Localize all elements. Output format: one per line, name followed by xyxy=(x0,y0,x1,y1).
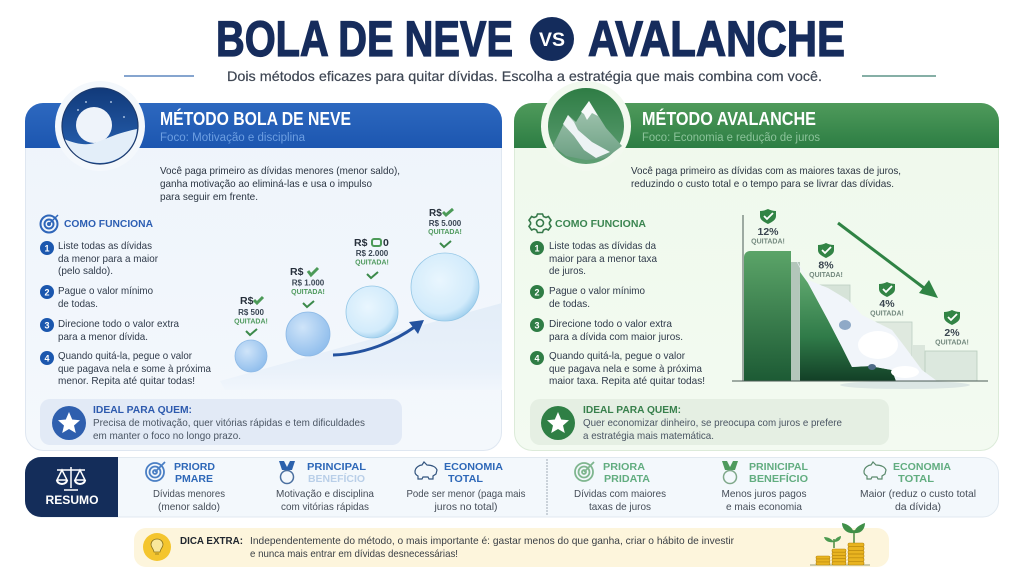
intro text: Você paga primeiro as dívidas menores (menor saldo), xyxy=(160,165,400,177)
heading: como funciona: COMO FUNCIONA xyxy=(555,218,646,230)
column: principal benefício (bola de neve): BENEFÍCIO xyxy=(308,472,365,485)
step 1: (pelo saldo). xyxy=(58,265,113,277)
column: principal benefício (bola de neve): PRINCIPAL xyxy=(307,461,367,473)
label 2%: QUITADA! xyxy=(935,340,969,346)
step 4: Quando quitá-la, pegue o valor xyxy=(549,350,685,362)
step 4: 4 xyxy=(534,354,540,364)
column: principal benefício (avalanche) xyxy=(722,461,809,513)
column: prioridade (avalanche): Dívidas com maiores xyxy=(574,488,666,500)
step 1: de juros. xyxy=(549,265,586,277)
intro text xyxy=(160,165,400,203)
snowball 5000 xyxy=(411,208,479,321)
column: principal benefício (bola de neve): com vitórias rápidas xyxy=(281,501,369,513)
column: economia total (bola de neve): Pode ser menor (paga mais xyxy=(406,488,526,500)
intro text: ganha motivação ao eliminá-las e usa o impulso xyxy=(160,178,372,190)
step 3: para a menor dívida. xyxy=(58,331,148,343)
icon: light bulb xyxy=(143,533,171,561)
avalanche chart xyxy=(732,209,988,389)
steps list xyxy=(530,240,705,387)
title: avalanche: AVALANCHE xyxy=(588,11,845,67)
callout: ideal para quem xyxy=(40,399,402,445)
snow flow xyxy=(792,253,937,381)
steps list xyxy=(40,240,211,387)
mountain slope xyxy=(800,272,896,381)
step 1: maior para a menor taxa xyxy=(549,253,657,265)
callout: ideal para quem: Precisa de motivação, quer vitórias rápidas e tem dificuldades xyxy=(93,417,365,429)
header title: MÉTODO BOLA DE NEVE xyxy=(160,108,351,129)
step 3: 3 xyxy=(44,320,50,330)
callout: dica extra xyxy=(134,523,889,567)
step 1 xyxy=(530,240,657,277)
title: bola de neve: BOLA DE NEVE xyxy=(216,11,513,67)
column: prioridade (bola de neve): PRIORD xyxy=(174,461,215,473)
step 3: Direcione todo o valor extra xyxy=(549,318,672,330)
header bar: avalanche xyxy=(514,103,999,148)
step 2 xyxy=(530,285,645,310)
step 4: que pagava nela e some à próxima xyxy=(549,363,702,375)
column: economia total (avalanche): Maior (reduz o custo total xyxy=(860,488,976,500)
label 4%: QUITADA! xyxy=(870,310,904,318)
label 2%: 2% xyxy=(944,327,960,339)
column: economia total (avalanche): da dívida) xyxy=(895,501,941,513)
icon: scales xyxy=(57,467,85,490)
vs badge: VS xyxy=(539,30,565,51)
column: economia total (avalanche): ECONOMIA xyxy=(893,461,951,473)
step 2: de todas. xyxy=(549,298,590,310)
label 8% xyxy=(809,243,843,279)
callout: ideal para quem: IDEAL PARA QUEM: xyxy=(583,404,681,416)
callout: ideal para quem xyxy=(530,399,889,445)
snowball 2000: 0 xyxy=(383,237,389,249)
snowball 1000 xyxy=(286,266,330,356)
resumo badge xyxy=(25,457,118,517)
snowball 5000: R$ 5.000 xyxy=(429,219,462,228)
callout: dica extra: Independentemente do método, o mais importante é: gastar menos do que ganha, criar o hábito de investir xyxy=(250,535,734,547)
step 4: menor. Repita até quitar todas! xyxy=(58,375,195,387)
label 2% xyxy=(935,310,969,346)
snowball 2000: R$ 2.000 xyxy=(356,249,389,258)
snowball 1000: R$ 1.000 xyxy=(292,278,325,288)
snowball 1000: QUITADA! xyxy=(291,289,325,296)
step 1 xyxy=(40,240,158,277)
column: economia total (avalanche): TOTAL xyxy=(898,473,935,485)
column: principal benefício (avalanche): e mais economia xyxy=(726,501,802,513)
callout: ideal para quem: a estratégia mais matemática. xyxy=(583,430,714,442)
label 12%: QUITADA! xyxy=(751,238,785,246)
intro text: para seguir em frente. xyxy=(160,191,258,203)
snowball 500: QUITADA! xyxy=(234,318,268,326)
step 1: 1 xyxy=(534,244,540,254)
icon: target xyxy=(40,215,58,232)
step 4 xyxy=(40,350,211,387)
callout: ideal para quem: Quer economizar dinheiro, se preocupa com juros e prefere xyxy=(583,417,842,429)
header bar: bola de neve xyxy=(25,103,502,148)
label 8%: 8% xyxy=(818,260,834,272)
callout: ideal para quem: em manter o foco no longo prazo. xyxy=(93,430,241,442)
callout: dica extra: e nunca mais entrar em dívidas desnecessárias! xyxy=(250,548,458,560)
panel: método bola de neve xyxy=(25,81,502,450)
snowball 2000: QUITADA! xyxy=(355,260,389,266)
header focus: Foco: Motivação e disciplina xyxy=(160,132,306,144)
column: prioridade (bola de neve): (menor saldo) xyxy=(158,501,220,513)
subtitle: Dois métodos eficazes para quitar dívidas. Escolha a estratégia que mais combina com você. xyxy=(227,68,822,84)
resumo badge: RESUMO xyxy=(46,493,98,507)
column: prioridade (bola de neve): PMARE xyxy=(175,473,213,485)
column: principal benefício (avalanche): Menos juros pagos xyxy=(722,488,806,500)
column: prioridade (avalanche): PRIDATA xyxy=(604,473,650,485)
step 4: 4 xyxy=(44,354,50,364)
label 4% xyxy=(870,282,904,318)
icon: mountain medallion xyxy=(541,81,631,171)
header title: MÉTODO AVALANCHE xyxy=(642,108,816,129)
callout: ideal para quem: IDEAL PARA QUEM: xyxy=(93,404,192,416)
snowball 2000: R$ xyxy=(354,237,368,249)
label 8%: QUITADA! xyxy=(809,272,843,279)
column: prioridade (avalanche): PRIORA xyxy=(603,461,645,473)
step 2: Pague o valor mínimo xyxy=(549,285,645,297)
step 2 xyxy=(40,285,153,310)
icon: snowball medallion xyxy=(55,81,145,171)
column: economia total (bola de neve): TOTAL xyxy=(448,473,484,485)
step 4 xyxy=(530,350,705,387)
panel: resumo xyxy=(25,457,998,517)
snowball 1000: R$ xyxy=(290,266,304,278)
intro text xyxy=(631,165,901,190)
step 1: da menor para a maior xyxy=(58,253,158,265)
step 4: Quando quitá-la, pegue o valor xyxy=(58,350,192,362)
arrow: growth xyxy=(333,320,424,355)
label 12%: 12% xyxy=(757,226,779,238)
step 3: para a dívida com maior juros. xyxy=(549,331,683,343)
step 1: Liste todas as dívidas da xyxy=(549,240,656,252)
snowball illustration xyxy=(220,208,502,390)
step 3 xyxy=(40,318,179,343)
panel: método avalanche xyxy=(514,81,999,450)
column: prioridade (avalanche): taxas de juros xyxy=(589,501,651,513)
column: prioridade (bola de neve) xyxy=(146,461,225,513)
step 2: 2 xyxy=(44,288,50,298)
column: prioridade (bola de neve): Dívidas menores xyxy=(153,488,225,500)
snowball 500: R$ xyxy=(240,295,254,307)
coin stacks xyxy=(816,543,864,565)
column: principal benefício (avalanche): PRINICIPAL xyxy=(749,461,809,473)
label 4%: 4% xyxy=(879,298,895,310)
snowball 500 xyxy=(234,295,268,372)
heading: como funciona: COMO FUNCIONA xyxy=(64,218,153,230)
column: economia total (avalanche) xyxy=(860,461,976,513)
icon: coins and plants xyxy=(810,523,870,565)
column: principal benefício (bola de neve): Motivação e disciplina xyxy=(276,488,374,500)
step 3: 3 xyxy=(534,320,540,330)
step 1: 1 xyxy=(44,244,50,254)
snowball 2000 xyxy=(346,237,398,338)
snowball 5000: R$ xyxy=(429,208,442,219)
column: economia total (bola de neve): juros no total) xyxy=(434,501,498,513)
step 2: 2 xyxy=(534,288,540,298)
step 3: Direcione todo o valor extra xyxy=(58,318,179,330)
header focus: Foco: Economia e redução de juros xyxy=(642,132,820,144)
step 2: Pague o valor mínimo xyxy=(58,285,153,297)
callout: dica extra: DICA EXTRA: xyxy=(180,535,243,547)
step 4: que pagava nela e some à próxima xyxy=(58,363,211,375)
arrow: descending xyxy=(838,223,938,298)
step 3 xyxy=(530,318,683,343)
step 4: maior taxa. Repita até quitar todas! xyxy=(549,375,705,387)
title xyxy=(216,11,845,67)
bar 12% xyxy=(744,251,791,381)
column: prioridade (avalanche) xyxy=(574,461,666,513)
intro text: Você paga primeiro as dívidas com as maiores taxas de juros, xyxy=(631,165,901,177)
column: principal benefício (bola de neve) xyxy=(276,461,374,513)
intro text: reduzindo o custo total e o tempo para se livrar das dívidas. xyxy=(631,178,894,190)
column: economia total (bola de neve): ECONOMIA xyxy=(444,461,503,473)
column: principal benefício (avalanche): BENEFÍCIO xyxy=(749,472,808,485)
icon: gear xyxy=(529,214,551,232)
snowball 5000: QUITADA! xyxy=(428,229,462,236)
step 2: de todas. xyxy=(58,298,98,310)
column: economia total (bola de neve) xyxy=(406,461,526,513)
step 1: Liste todas as dívidas xyxy=(58,240,152,252)
vs badge xyxy=(530,17,574,61)
snowball 500: R$ 500 xyxy=(238,308,264,317)
label 12% xyxy=(751,209,785,246)
